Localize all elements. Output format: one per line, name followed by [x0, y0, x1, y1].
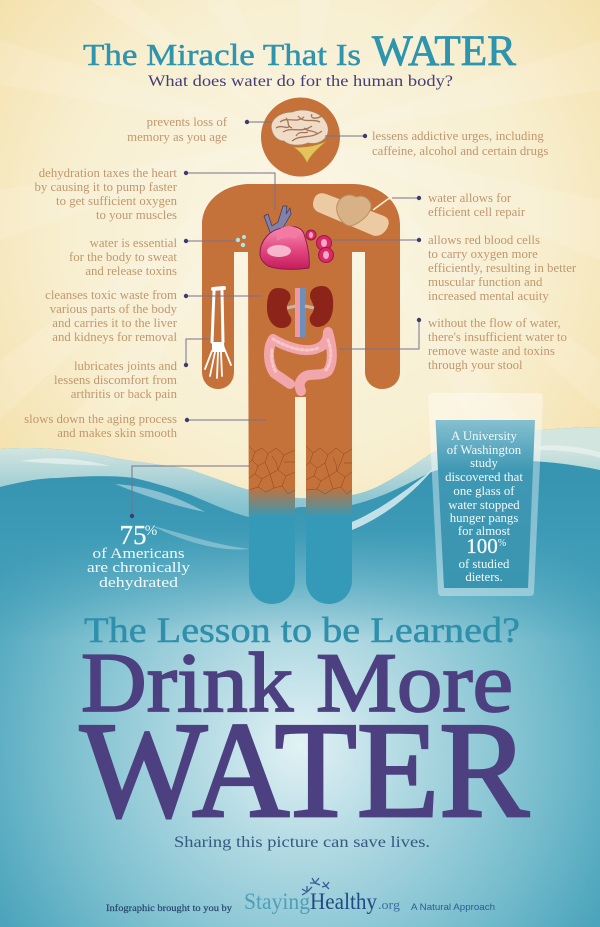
- text: waste flow: there's insufficient water to: [428, 330, 567, 344]
- glass of water: [428, 393, 543, 596]
- glass: study text: of Washington: [447, 443, 522, 457]
- text: heart: to get sufficient oxygen: [56, 194, 178, 208]
- text: red blood cells: to carry oxygen more: [428, 247, 538, 261]
- text: red blood cells: allows red blood cells: [428, 233, 540, 247]
- callout: 75% dehydrated: are chronically: [87, 560, 191, 576]
- text: joints: lessens discomfort from: [54, 373, 177, 387]
- glass: study text: study: [470, 456, 498, 470]
- text: sweat: and release toxins: [85, 264, 177, 278]
- title: WATER: [372, 28, 516, 75]
- text: addictive urges: [372, 129, 548, 158]
- wave: right streak: [540, 445, 600, 458]
- glass: study text: A University: [451, 429, 517, 443]
- text: toxic waste: and carries it to the liver: [52, 316, 178, 330]
- text: joints: lubricates joints and: [74, 359, 178, 373]
- text: addictive urges: caffeine, alcohol and certain drugs: [372, 144, 548, 158]
- icon: kidneys: [267, 286, 333, 337]
- text: toxic waste: various parts of the body: [50, 302, 178, 316]
- title: The Miracle That Is: [83, 37, 361, 72]
- text: cell repair: efficient cell repair: [428, 205, 526, 219]
- text: joints: [54, 359, 178, 401]
- icon: brain: [271, 110, 328, 163]
- text: waste flow: [428, 316, 567, 372]
- text: aging: slows down the aging process: [24, 412, 177, 426]
- icon: arm bones: [205, 288, 231, 378]
- text: heart: dehydration taxes the heart: [39, 166, 177, 180]
- background: sunburst rays: [0, 0, 600, 420]
- glass: study text: one glass of: [453, 484, 515, 498]
- figure: head: [261, 98, 340, 176]
- glass: study text: for almost: [458, 524, 511, 538]
- text: cell repair: [428, 191, 526, 219]
- text: toxic waste: [45, 288, 178, 344]
- text: sweat: [69, 236, 177, 278]
- text: memory: [127, 115, 228, 144]
- icon: heart: [260, 206, 309, 269]
- glass: study text: dieters.: [465, 570, 503, 584]
- glass: study text: hunger pangs: [450, 511, 518, 525]
- text: addictive urges: lessens addictive urges, including: [372, 129, 544, 143]
- text: cell repair: water allows for: [428, 191, 512, 205]
- text: sharing: Sharing this picture can save lives.: [174, 834, 430, 851]
- footer: credit: Infographic brought to you by: [106, 903, 232, 914]
- figure: torso, arms and legs: [202, 184, 400, 604]
- icon: red blood cells: [306, 230, 334, 262]
- icon: large intestine: [269, 332, 332, 391]
- wave: deep water: [0, 460, 600, 660]
- background: cream sky: [0, 0, 600, 620]
- callout: 75% dehydrated: 75: [120, 520, 146, 550]
- footer: [106, 878, 495, 914]
- text: heart: to your muscles: [96, 208, 177, 222]
- human figure: [202, 98, 400, 604]
- text: toxic waste: and kidneys for removal: [52, 330, 177, 344]
- text: waste flow: remove waste and toxins: [428, 344, 555, 358]
- wave: right highlight: [352, 468, 434, 530]
- footer: tagline: A Natural Approach: [411, 902, 495, 913]
- text: red blood cells: muscular function and: [428, 275, 543, 289]
- text: sweat: for the body to sweat: [69, 250, 177, 264]
- glass: study text: %: [498, 538, 506, 549]
- footer: logo: Healthy: [310, 889, 377, 914]
- text: red blood cells: [428, 233, 577, 303]
- background: sea: [0, 427, 600, 927]
- footer: logo: [244, 889, 401, 914]
- glass: study text: 100: [466, 534, 498, 558]
- title: [83, 28, 516, 75]
- callout: 75% dehydrated: dehydrated: [99, 575, 179, 591]
- glass: study text: discovered that: [445, 470, 523, 484]
- callout: 75% dehydrated: [87, 520, 191, 591]
- glass: body: [428, 393, 543, 596]
- heading: water: WATER: [80, 694, 530, 846]
- text: red blood cells: increased mental acuity: [428, 289, 549, 303]
- footer: logo flowers: [302, 878, 329, 895]
- text: sweat: water is essential: [90, 236, 177, 250]
- glass: study text: [445, 429, 523, 584]
- text: aging: [24, 412, 178, 440]
- wave: light upper band: [0, 427, 600, 530]
- heading: lesson: The Lesson to be Learned?: [84, 610, 520, 650]
- text: heart: by causing it to pump faster: [34, 180, 178, 194]
- icon: water droplets: [236, 235, 246, 247]
- callout: 75% dehydrated: of Americans: [92, 546, 185, 562]
- callout: 75% dehydrated: %: [145, 523, 157, 539]
- footer: logo: Staying: [244, 889, 310, 914]
- footer: logo: .org: [378, 897, 401, 912]
- text: joints: arthritis or back pain: [71, 387, 178, 401]
- text: waste flow: through your stool: [428, 358, 523, 372]
- text: heart: [34, 166, 178, 222]
- text: memory: prevents loss of: [147, 115, 228, 129]
- text: aging: and makes skin smooth: [57, 426, 178, 440]
- subtitle: What does water do for the human body?: [148, 73, 453, 90]
- icon: bandage with heart: [313, 193, 392, 236]
- heading: drink more: Drink More: [81, 636, 513, 730]
- text: waste flow: without the flow of water,: [428, 316, 561, 330]
- text: toxic waste: cleanses toxic waste from: [45, 288, 177, 302]
- glass: study text: water stopped: [448, 498, 520, 512]
- connector lines: [130, 120, 421, 518]
- text: memory: memory as you age: [127, 130, 227, 144]
- glass: water: [436, 420, 535, 588]
- wave: left highlights: [20, 458, 250, 549]
- figure: dry cracked skin: [249, 446, 352, 494]
- glass: study text: of studied: [459, 557, 510, 571]
- text: red blood cells: efficiently, resulting in better: [428, 261, 577, 275]
